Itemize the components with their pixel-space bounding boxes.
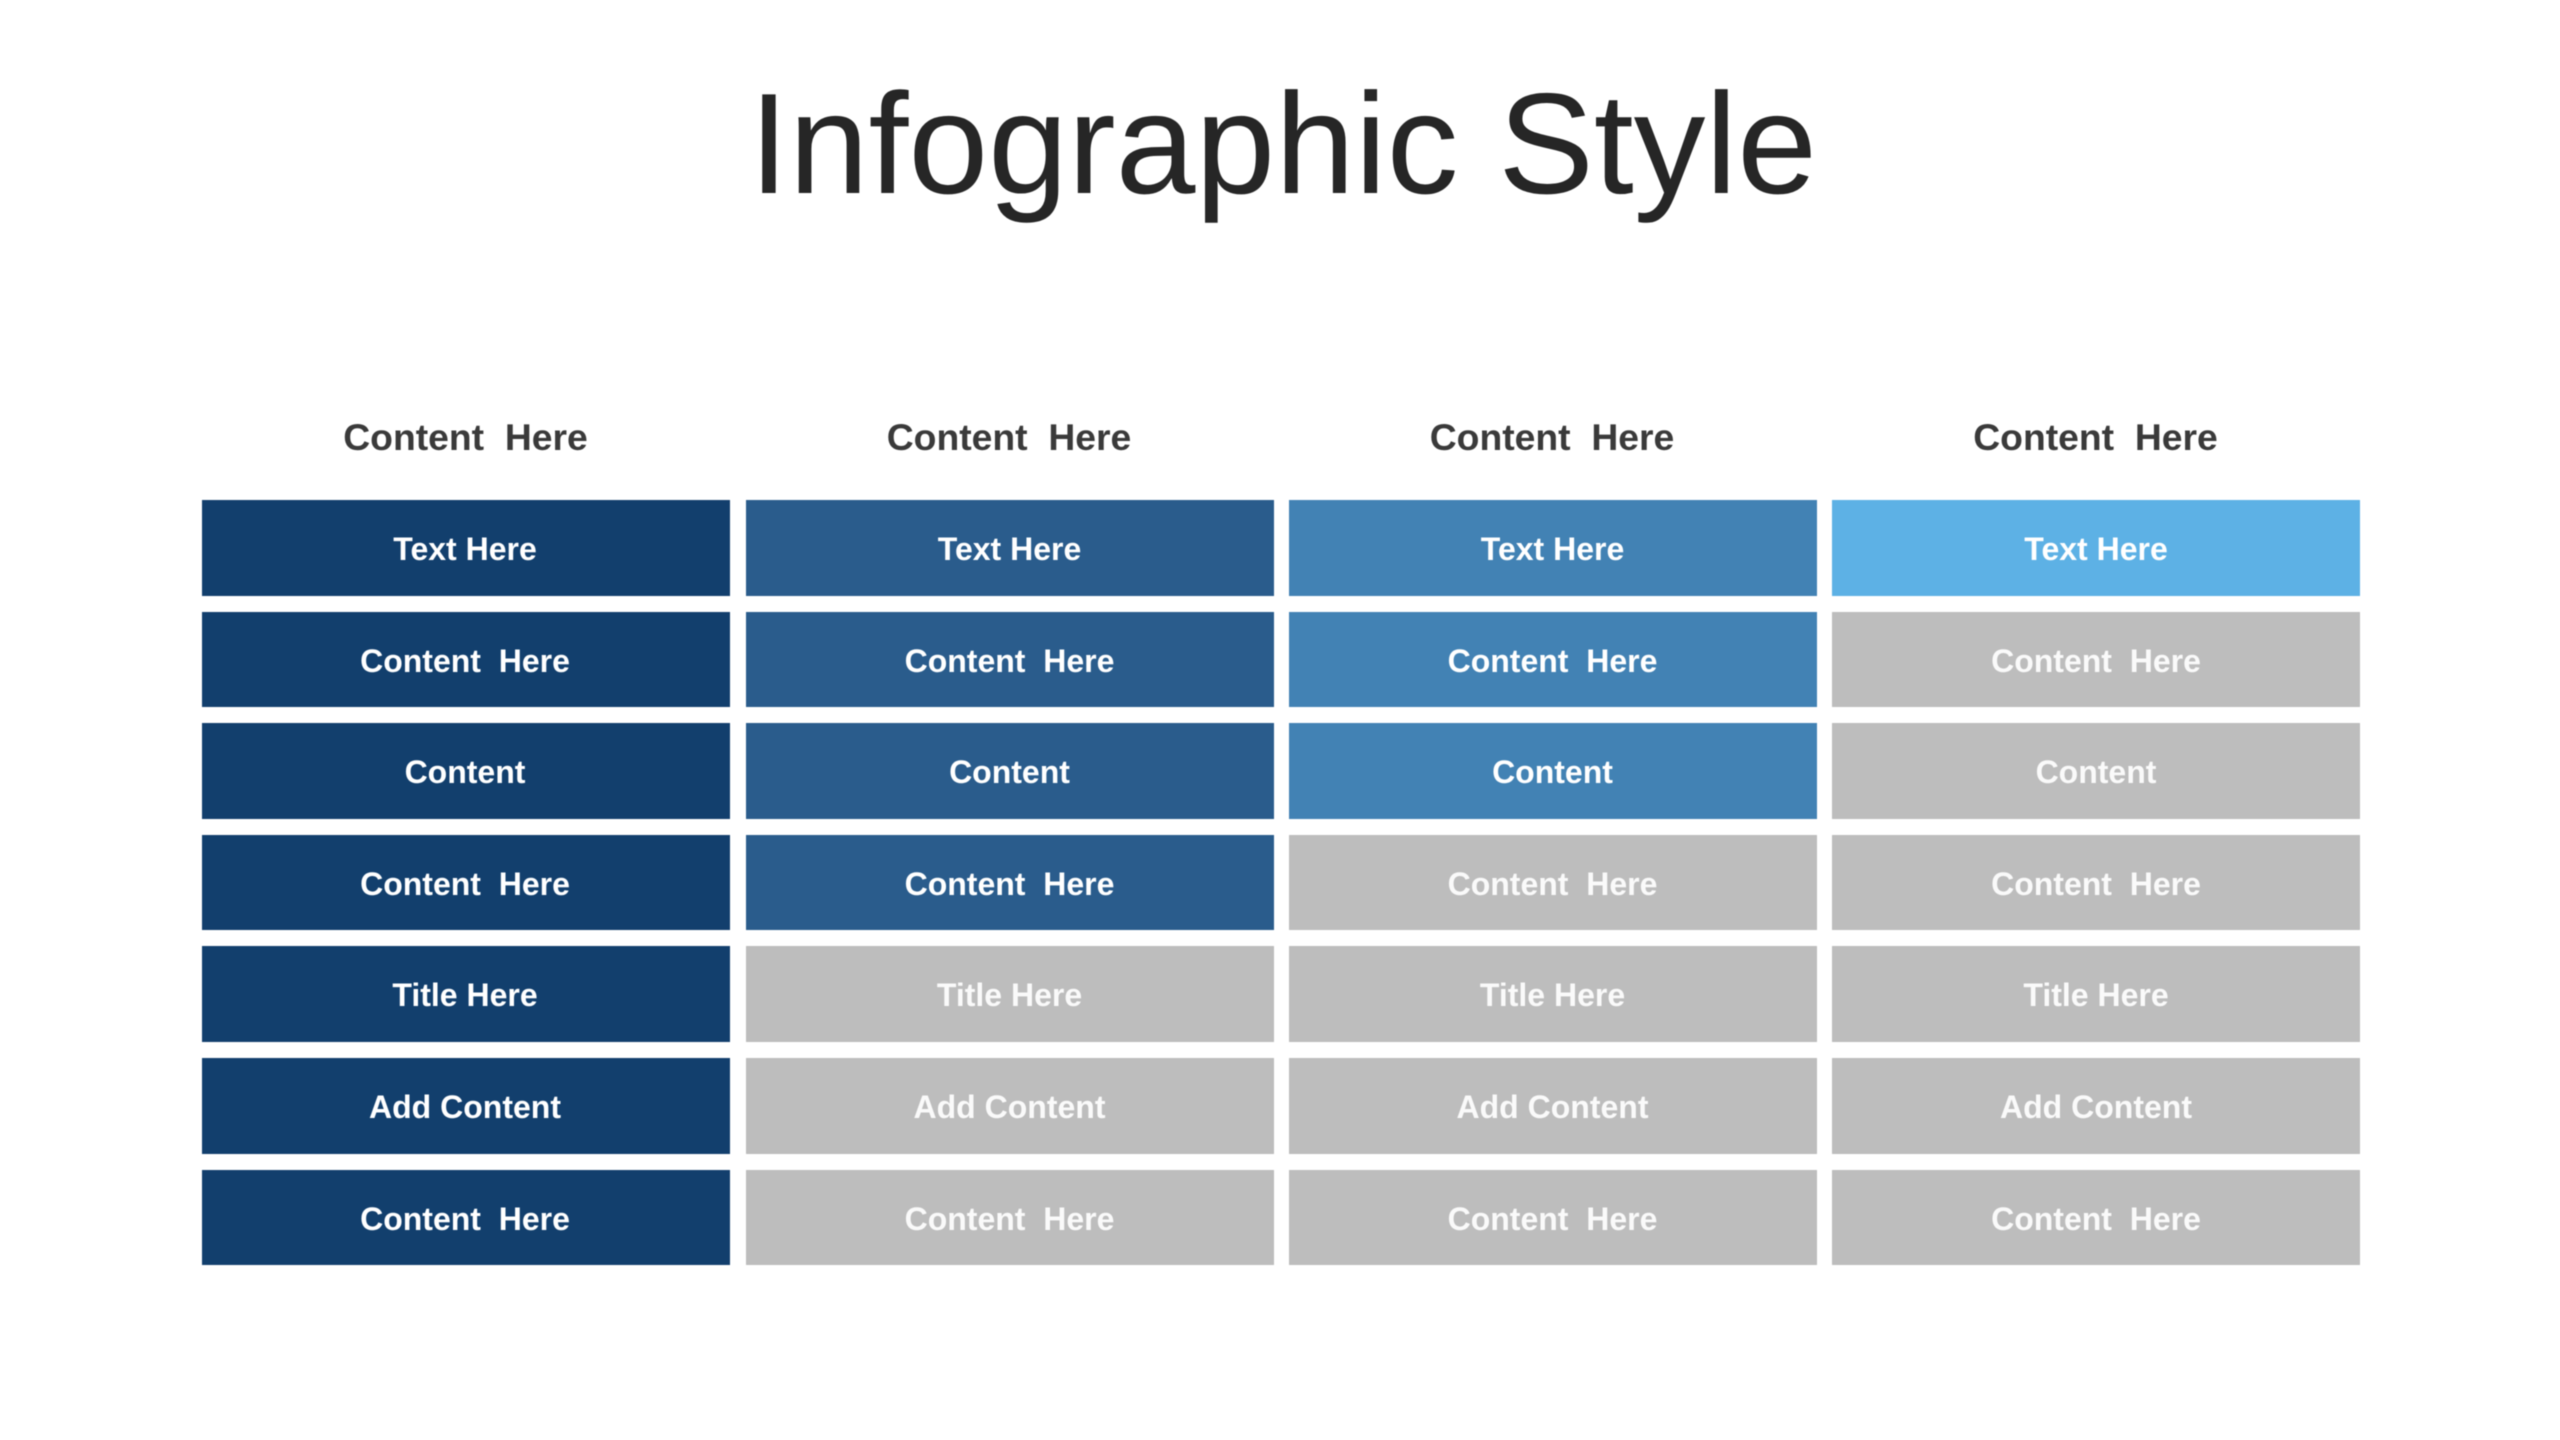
cell: column 3 row 5: Title Here [1480,977,1625,1013]
cell: column 2 row 1 [746,500,1274,596]
cell: column 1 row 7 [202,1170,730,1265]
cell: column 3 row 2 [1288,612,1816,707]
cell: column 2 row 6: Add Content [914,1089,1105,1125]
cell: column 2 row 2 [746,612,1274,707]
cell: column 3 row 1: Text Here [1481,531,1624,567]
cell: column 2 row 1: Text Here [938,531,1081,567]
cell: column 3 row 4: Content Here [1448,866,1657,902]
cell: column 1 row 4 [202,835,730,930]
cell: column 4 row 7 [1832,1170,2360,1265]
column heading 2: Content Here [887,416,1131,458]
cell: column 4 row 5: Title Here [2023,977,2169,1013]
cell: column 1 row 1 [202,500,730,596]
column heading 3: Content Here [1430,416,1674,458]
cell: column 4 row 3: Content [2036,754,2156,790]
cell: column 2 row 7: Content Here [905,1201,1114,1237]
cell: column 3 row 3: Content [1492,754,1613,790]
cell: column 4 row 2 [1832,612,2360,707]
title: Infographic Style [749,64,1817,224]
cell: column 2 row 3 [746,723,1274,819]
cell: column 2 row 7 [746,1170,1274,1265]
cell: column 1 row 2: Content Here [360,643,570,679]
cell: column 1 row 6 [202,1058,730,1154]
cell: column 3 row 6 [1288,1058,1816,1154]
cell: column 1 row 1: Text Here [393,531,537,567]
cell: column 3 row 1 [1288,500,1816,596]
cell: column 4 row 4: Content Here [1991,866,2201,902]
cell: column 4 row 1: Text Here [2024,531,2168,567]
cell: column 2 row 5: Title Here [937,977,1082,1013]
cell: column 2 row 6 [746,1058,1274,1154]
cell: column 4 row 4 [1832,835,2360,930]
cell: column 4 row 1 [1832,500,2360,596]
cell: column 2 row 4 [746,835,1274,930]
cell: column 2 row 5 [746,946,1274,1042]
cell: column 3 row 5 [1288,946,1816,1042]
cell: column 3 row 2: Content Here [1448,643,1657,679]
cell: column 1 row 4: Content Here [360,866,570,902]
cell: column 4 row 6 [1832,1058,2360,1154]
column heading 1: Content Here [343,416,588,458]
cell: column 4 row 2: Content Here [1991,643,2201,679]
cell: column 1 row 6: Add Content [369,1089,561,1125]
cell: column 2 row 4: Content Here [905,866,1114,902]
cell: column 1 row 3: Content [405,754,525,790]
cell: column 3 row 7: Content Here [1448,1201,1657,1237]
cell: column 3 row 6: Add Content [1457,1089,1648,1125]
cell: column 1 row 5 [202,946,730,1042]
cell: column 4 row 3 [1832,723,2360,819]
cell: column 4 row 7: Content Here [1991,1201,2201,1237]
cell: column 1 row 3 [202,723,730,819]
cell: column 2 row 2: Content Here [905,643,1114,679]
cell: column 1 row 5: Title Here [392,977,538,1013]
cell: column 4 row 6: Add Content [2000,1089,2192,1125]
cell: column 4 row 5 [1832,946,2360,1042]
cell: column 3 row 7 [1288,1170,1816,1265]
cell: column 1 row 2 [202,612,730,707]
cell: column 3 row 4 [1288,835,1816,930]
cell: column 1 row 7: Content Here [360,1201,570,1237]
cell: column 2 row 3: Content [949,754,1070,790]
column heading 4: Content Here [1973,416,2218,458]
cell: column 3 row 3 [1288,723,1816,819]
